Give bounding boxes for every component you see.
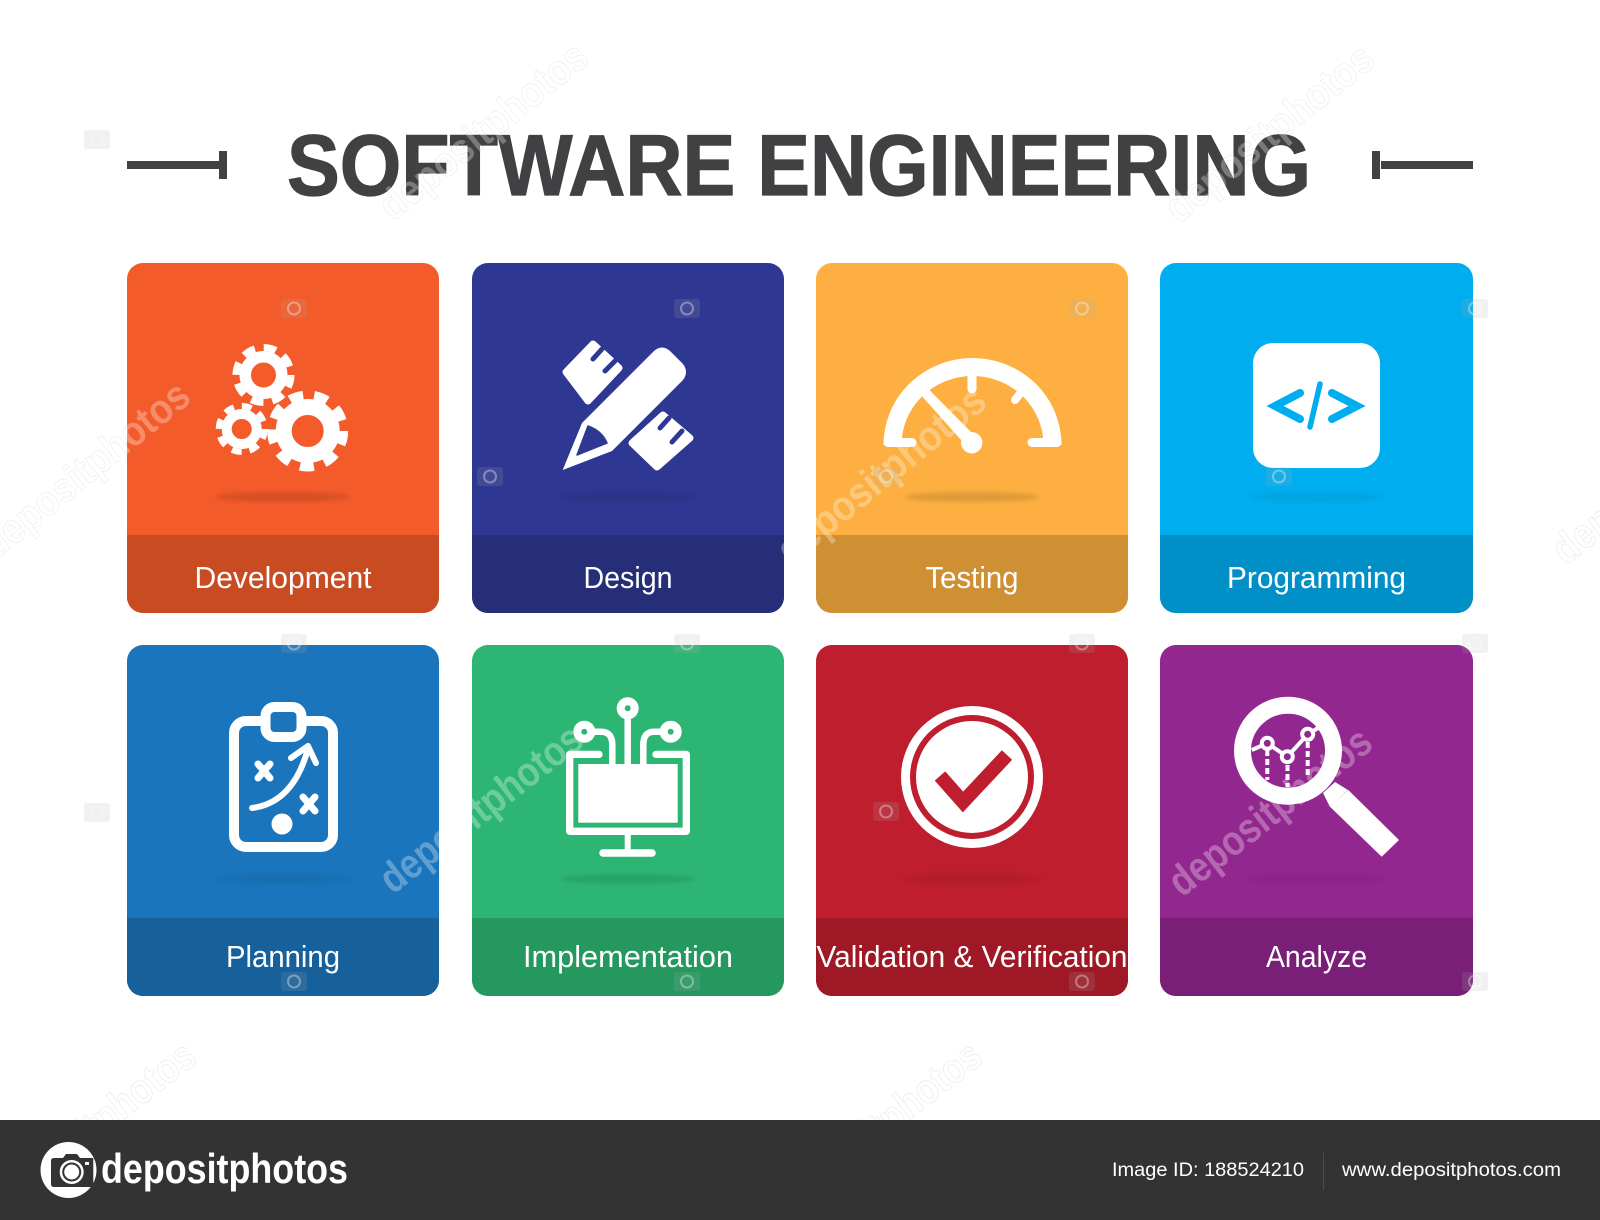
- label: Validation & Verification: Validation & Verification: [816, 939, 1128, 974]
- logo wordmark: depositphotos: [101, 1145, 348, 1192]
- icon: pencil and ruler: [563, 344, 690, 470]
- watermarks: depositphotos: [369, 32, 597, 229]
- icon: camera logo: [40, 1142, 96, 1198]
- panel: Analyze: [1160, 645, 1473, 996]
- left title rule: [127, 151, 227, 179]
- panel: Programming: [1160, 263, 1473, 613]
- icon: check badge: [901, 706, 1043, 848]
- panel: Testing: [816, 263, 1128, 613]
- watermarks: depositphotos: [370, 714, 592, 902]
- watermarks: depositphotos: [1155, 34, 1383, 231]
- icon: gears: [219, 348, 344, 467]
- icon: code tag: [1253, 343, 1380, 468]
- watermarks: depositphotos: [767, 376, 995, 573]
- label: Programming: Programming: [1227, 560, 1406, 595]
- label: Implementation: Implementation: [523, 939, 733, 974]
- faint watermark outlines on the white background: depositphotos: [1155, 34, 1383, 231]
- panel: Planning: [127, 645, 439, 996]
- label: Design: Design: [584, 560, 672, 595]
- site url: www.depositphotos.com: [1341, 1160, 1561, 1181]
- faint watermark outlines on the white background: depositphotos: [369, 32, 597, 229]
- right title rule: [1372, 151, 1473, 179]
- label: Analyze: Analyze: [1266, 939, 1367, 974]
- panel: Design: [472, 263, 784, 613]
- label: Testing: Testing: [926, 560, 1018, 595]
- icon: clipboard strategy: [234, 707, 333, 847]
- title: SOFTWARE ENGINEERING: [287, 118, 1311, 214]
- panel: Implementation: [472, 645, 784, 996]
- watermarks: [0, 32, 1488, 991]
- panel: Development: [127, 263, 439, 613]
- icon: speedometer: [888, 367, 1057, 453]
- watermarks: depositphotos: [1159, 717, 1381, 905]
- panel: Validation & Verification: [816, 645, 1128, 996]
- faint watermark outlines on the white background: depositphotos: [769, 1031, 991, 1219]
- label: Planning: Planning: [226, 939, 340, 974]
- icon: circuit monitor: [570, 701, 686, 853]
- footer bar: [0, 1120, 1600, 1220]
- label: Development: Development: [194, 560, 372, 595]
- icon: magnifier chart: [1242, 705, 1399, 857]
- image id: Image ID: 188524210: [1112, 1160, 1304, 1181]
